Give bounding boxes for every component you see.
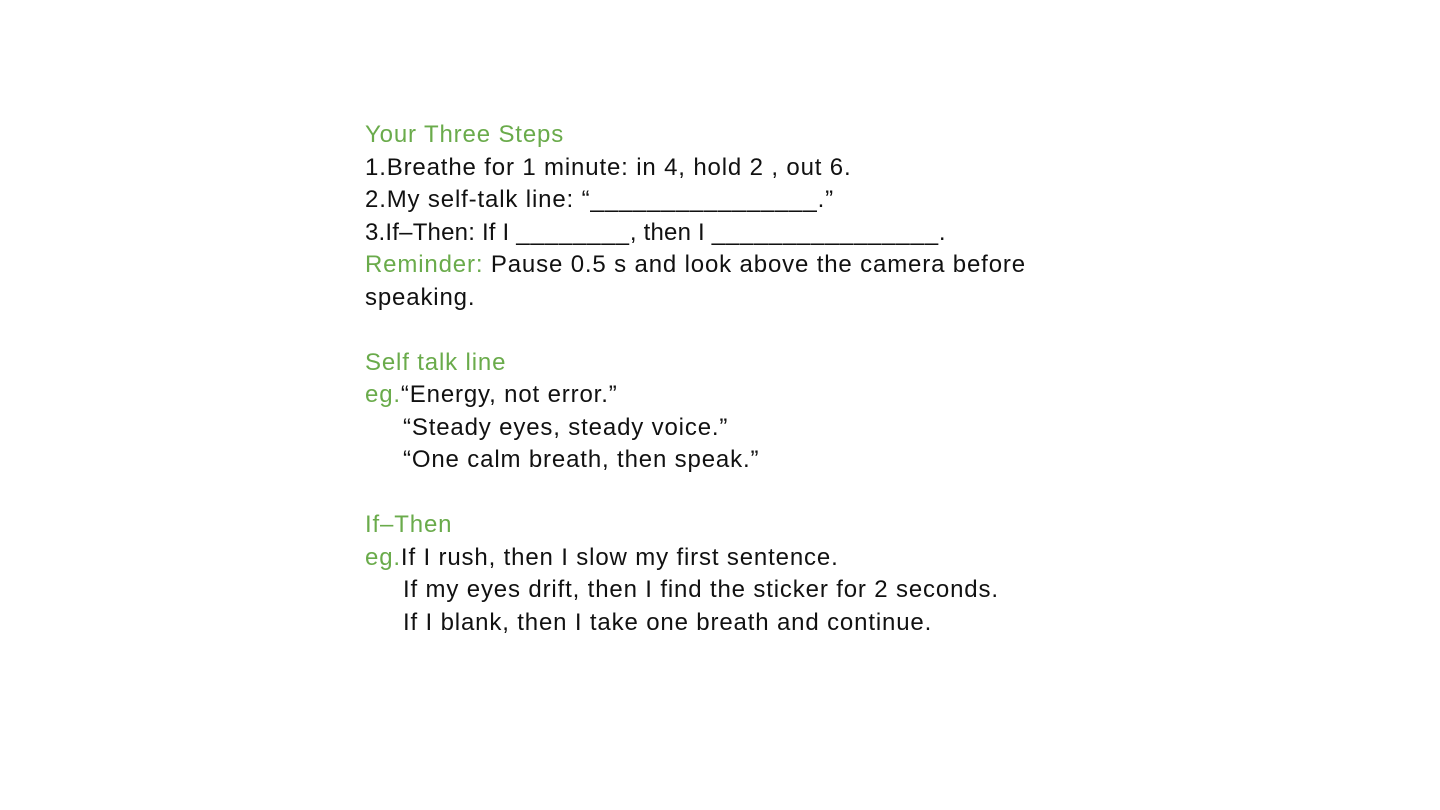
reminder: Reminder: Pause 0.5 s and look above the camera before [365,251,1026,278]
self talk examples: “Steady eyes, steady voice.” [403,414,728,440]
text block: three steps and examples [365,121,1026,636]
reminder: speaking. [365,284,475,310]
self talk examples [365,381,759,473]
step 3: 3.If–Then: If I ________, then I ________________. [365,218,946,246]
if-then examples [365,544,999,636]
if-then examples: If I blank, then I take one breath and continue. [403,608,932,636]
heading: If–Then: If–Then [365,511,452,538]
if-then examples: If my eyes drift, then I find the sticker for 2 seconds. [403,576,999,603]
step 2: 2.My self-talk line: “________________.” [365,186,834,213]
self talk examples: “One calm breath, then speak.” [403,446,759,473]
reminder [365,251,1026,310]
if-then examples: eg.If I rush, then I slow my first sentence. [365,544,839,570]
step 1: 1.Breathe for 1 minute: in 4, hold 2 , out 6. [365,154,852,180]
heading: Self talk line: Self talk line [365,348,506,376]
self talk examples: eg.“Energy, not error.” [365,381,618,408]
heading: Your Three Steps: Your Three Steps [365,121,564,148]
